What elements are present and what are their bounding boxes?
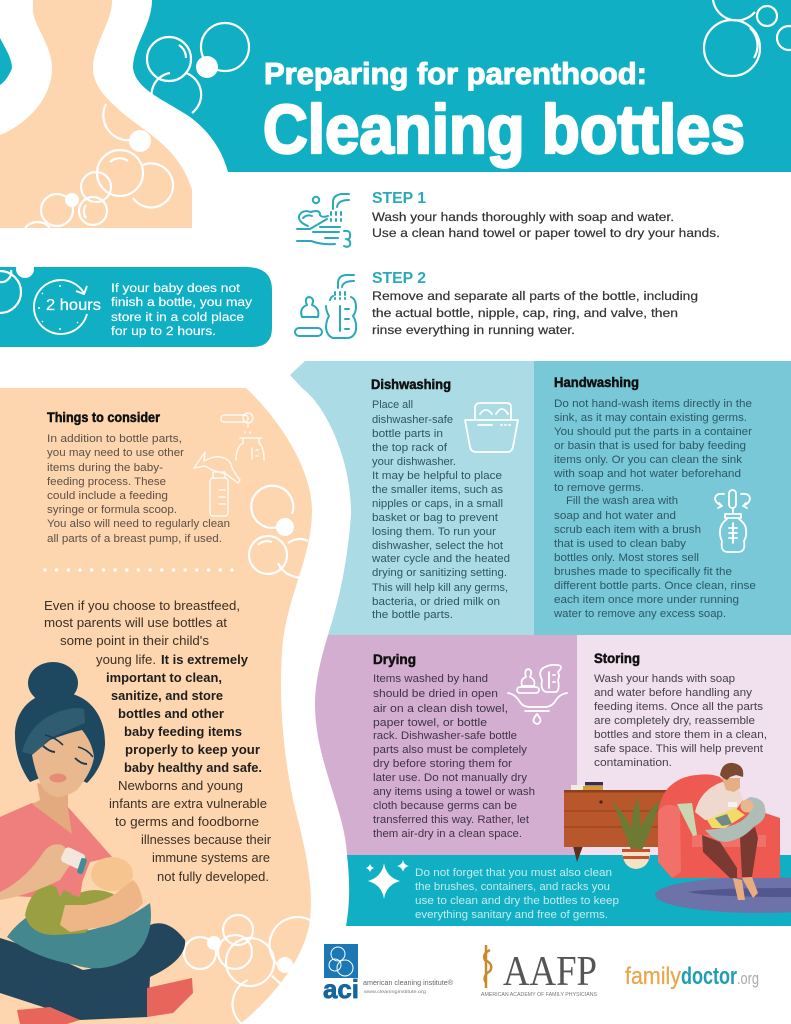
panel: handwashing bbox=[534, 361, 791, 635]
things to consider text: In addition to bottle parts, bbox=[47, 433, 182, 445]
panel: 2 hours callout bbox=[0, 260, 272, 347]
handwashing text: soap and hot water and bbox=[554, 510, 676, 522]
title: Cleaning bottles bbox=[263, 91, 745, 168]
dishwashing text: dishwasher, select the hot bbox=[372, 540, 503, 552]
illustration: mother bottle-feeding baby bbox=[0, 662, 193, 1024]
main text: illnesses because their bbox=[141, 832, 272, 847]
dishwashing text: bacteria, or dried milk on bbox=[372, 596, 500, 608]
drying text: them air-dry in a clean space. bbox=[373, 828, 522, 840]
reminder text: use to clean and dry the bottles to keep bbox=[415, 895, 619, 907]
reminder text: the brushes, containers, and racks you bbox=[415, 881, 610, 893]
main text bbox=[44, 598, 272, 884]
drying text: should be dried in open bbox=[373, 688, 498, 700]
callout text bbox=[111, 281, 253, 338]
things to consider text: could include a feeding bbox=[47, 490, 168, 502]
handwashing text: scrub each item with a brush bbox=[554, 524, 701, 536]
logo: American Cleaning Institute bbox=[323, 944, 453, 1004]
header bubbles bbox=[147, 0, 791, 113]
main text: baby feeding items bbox=[124, 724, 242, 739]
logo: AAFP bbox=[481, 945, 598, 998]
step 1 text: Wash your hands thoroughly with soap and water. bbox=[372, 210, 674, 224]
dishwashing text: It may be helpful to place bbox=[372, 470, 502, 482]
handwashing text: items only. Or you can clean the sink bbox=[554, 454, 743, 466]
main text: Newborns and young bbox=[118, 778, 243, 793]
step 2 text: rinse everything in running water. bbox=[372, 323, 575, 337]
panel: storing bbox=[577, 635, 791, 855]
dishwashing heading: Dishwashing bbox=[371, 376, 451, 392]
step 2 bbox=[295, 270, 698, 338]
things to consider text: you may need to use other bbox=[47, 447, 184, 459]
icon: feeding syringe and scoop bbox=[221, 413, 264, 460]
main text: properly to keep your bbox=[125, 742, 260, 757]
things to consider text bbox=[47, 433, 230, 545]
bubbles bottom bbox=[184, 915, 310, 1024]
storing text bbox=[594, 673, 767, 769]
handwashing text: You should put the parts in a container bbox=[554, 426, 752, 438]
handwashing text: each item once more under running bbox=[554, 594, 739, 606]
handwashing text: different bottle parts. Once clean, rinse bbox=[554, 580, 756, 592]
clock label: 2 hours bbox=[46, 297, 101, 314]
main text: Even if you choose to breastfeed, bbox=[44, 598, 240, 613]
panel: drying bbox=[315, 635, 577, 855]
handwashing text: or basin that is used for baby feeding bbox=[554, 440, 746, 452]
panel: peach bottle silhouette bbox=[0, 0, 192, 228]
storing text: feeding items. Once all the parts bbox=[594, 701, 764, 713]
drying text: transferred this way. Rather, let bbox=[373, 814, 529, 826]
illustration: father feeding baby in armchair bbox=[564, 763, 791, 913]
dotted divider bbox=[45, 568, 232, 572]
main text: young life. bbox=[96, 652, 156, 667]
storing text: contamination. bbox=[594, 757, 672, 769]
step 1 heading: STEP 1 bbox=[372, 190, 426, 207]
main text: important to clean, bbox=[106, 670, 222, 685]
things to consider text: feeding process. These bbox=[47, 476, 166, 488]
dishwashing text: drying or sanitizing setting. bbox=[372, 567, 507, 579]
cushion bbox=[677, 803, 697, 836]
title bbox=[263, 56, 745, 168]
handwashing text: bottles only. Most stores sell bbox=[554, 552, 699, 564]
feet bbox=[17, 978, 193, 1024]
dishwashing text: the bottle parts. bbox=[372, 609, 453, 621]
callout text: store it in a cold place bbox=[111, 310, 244, 324]
drying text bbox=[373, 673, 535, 840]
bubbles bbox=[249, 486, 308, 578]
icon: breast pump bbox=[194, 452, 240, 516]
storing text: bottles and store them in a clean, bbox=[594, 729, 767, 741]
drying text: paper towel, or bottle bbox=[373, 717, 487, 729]
potted plant bbox=[612, 797, 660, 869]
storing text: safe space. This will help prevent bbox=[594, 743, 763, 755]
things to consider heading: Things to consider bbox=[47, 409, 160, 425]
dishwashing text: basket or bag to prevent bbox=[372, 512, 498, 524]
logo: American Cleaning Institute: aci bbox=[323, 974, 359, 1004]
step 1 text bbox=[372, 210, 720, 240]
panel: teal header bbox=[133, 0, 791, 172]
drying text: Items washed by hand bbox=[373, 673, 488, 685]
drying text: dry before storing them for bbox=[373, 758, 512, 770]
step 2 text: the actual bottle, nipple, cap, ring, and valve, then bbox=[372, 306, 678, 320]
step 2 heading: STEP 2 bbox=[372, 270, 426, 287]
storing text: and water before handling any bbox=[594, 687, 753, 699]
main text: baby healthy and safe. bbox=[124, 760, 262, 775]
logo: American Cleaning Institute: american cleaning institute® bbox=[363, 978, 453, 987]
dishwashing text: bottle parts in bbox=[372, 428, 443, 440]
icon: bottle with arrows bbox=[715, 490, 750, 552]
logo: American Cleaning Institute: www.cleaninginstitute.org bbox=[364, 989, 427, 994]
handwashing text bbox=[553, 398, 756, 620]
things to consider text: items during the baby- bbox=[47, 462, 163, 474]
main text: It is extremely bbox=[161, 652, 249, 667]
icon: dishwasher bbox=[465, 403, 518, 452]
logo: familydoctor.org bbox=[625, 963, 759, 990]
logo: familydoctor.org: family bbox=[625, 963, 681, 990]
dishwashing text: the smaller items, such as bbox=[372, 484, 504, 496]
main text: to germs and foodborne bbox=[115, 814, 259, 829]
legs bbox=[0, 923, 185, 1020]
main text: bottles and other bbox=[118, 706, 224, 721]
drying heading: Drying bbox=[373, 651, 416, 667]
handwashing text: that is used to clean baby bbox=[554, 538, 687, 550]
handwashing text: Do not hand-wash items directly in the bbox=[554, 398, 752, 410]
drying text: later use. Do not manually dry bbox=[373, 772, 528, 784]
reminder text bbox=[415, 867, 619, 921]
rug bbox=[655, 877, 791, 913]
icon: bottle under tap bbox=[295, 275, 356, 338]
drying text: any items using a towel or wash bbox=[373, 786, 535, 798]
dishwashing text: losing them. To run your bbox=[372, 526, 496, 538]
handwashing text: sink, as it may contain existing germs. bbox=[554, 412, 747, 424]
dishwashing text: nipples or caps, in a small bbox=[372, 498, 503, 510]
father bbox=[677, 763, 758, 900]
title: Preparing for parenthood: bbox=[264, 56, 647, 91]
neck bbox=[32, 783, 72, 834]
main text: most parents will use bottles at bbox=[44, 615, 227, 630]
reminder text: Do not forget that you must also clean bbox=[415, 867, 612, 879]
bubbles on bottle bbox=[25, 104, 173, 228]
callout text: If your baby does not bbox=[111, 281, 241, 295]
callout text: for up to 2 hours. bbox=[111, 324, 216, 338]
panel: dishwashing bbox=[290, 361, 534, 635]
drying text: parts also must be completely bbox=[373, 744, 528, 756]
storing heading: Storing bbox=[594, 650, 640, 666]
step 1 text: Use a clean hand towel or paper towel to dry your hands. bbox=[372, 226, 720, 240]
things to consider text: syringe or formula scoop. bbox=[47, 504, 177, 516]
step 1 bbox=[297, 190, 720, 247]
handwashing heading: Handwashing bbox=[554, 374, 639, 390]
hair bbox=[15, 662, 105, 783]
handwashing text: water to remove any excess soap. bbox=[553, 608, 726, 620]
armchair bbox=[658, 774, 780, 878]
main text: not fully developed. bbox=[157, 869, 269, 884]
face bbox=[32, 730, 94, 797]
dishwashing text bbox=[371, 399, 510, 621]
dresser bbox=[564, 782, 670, 862]
logo: AAFP: AMERICAN ACADEMY OF FAMILY PHYSICIANS bbox=[481, 992, 598, 998]
callout text: finish a bottle, you may bbox=[111, 295, 253, 309]
pillow bbox=[7, 903, 151, 968]
panel: left peach column bbox=[0, 388, 312, 1024]
storing text: are completely dry, reassemble bbox=[594, 715, 755, 727]
dishwashing text: your dishwasher. bbox=[372, 456, 456, 468]
dishwashing text: water cycle and the heated bbox=[371, 553, 510, 565]
arm and bottle bbox=[0, 844, 143, 932]
things to consider text: You also will need to regularly clean bbox=[47, 518, 230, 530]
handwashing text: to remove germs. bbox=[554, 482, 644, 494]
nursing pillow and baby bbox=[705, 797, 766, 842]
dishwashing text: Place all bbox=[372, 399, 413, 411]
icon: washing hands bbox=[297, 194, 350, 247]
decoration: top-left teal fragment bbox=[0, 38, 12, 85]
dishwashing text: the top rack of bbox=[372, 442, 448, 454]
main text: infants are extra vulnerable bbox=[109, 796, 267, 811]
dishwashing text: dishwasher-safe bbox=[372, 414, 453, 426]
step 2 text bbox=[372, 289, 698, 337]
logo: familydoctor.org: .org bbox=[737, 969, 759, 988]
panel: teal reminder band bbox=[346, 855, 791, 926]
main text: immune systems are bbox=[152, 850, 270, 865]
icon: drying rack bbox=[508, 665, 567, 724]
drying text: cloth because germs can be bbox=[373, 800, 517, 812]
handwashing text: Fill the wash area with bbox=[566, 495, 678, 507]
icon: sparkles bbox=[366, 860, 409, 899]
shirt bbox=[0, 803, 112, 900]
main text: some point in their child's bbox=[60, 633, 210, 648]
logo: AAFP: AAFP bbox=[503, 949, 597, 995]
step 2 text: Remove and separate all parts of the bottle, including bbox=[372, 289, 698, 303]
things to consider text: all parts of a breast pump, if used. bbox=[47, 533, 222, 545]
storing text: Wash your hands with soap bbox=[594, 673, 735, 685]
handwashing text: with soap and hot water beforehand bbox=[553, 468, 741, 480]
icon: clock bbox=[34, 280, 87, 334]
main text: sanitize, and store bbox=[111, 688, 223, 703]
baby bbox=[25, 857, 133, 935]
drying text: rack. Dishwasher-safe bottle bbox=[373, 730, 517, 742]
reminder text: everything sanitary and free of germs. bbox=[415, 909, 608, 921]
logo: familydoctor.org: doctor bbox=[681, 963, 737, 990]
dishwashing text: This will help kill any germs, bbox=[372, 582, 508, 594]
handwashing text: brushes made to specifically fit the bbox=[554, 566, 732, 578]
drying text: air on a clean dish towel, bbox=[373, 703, 508, 715]
